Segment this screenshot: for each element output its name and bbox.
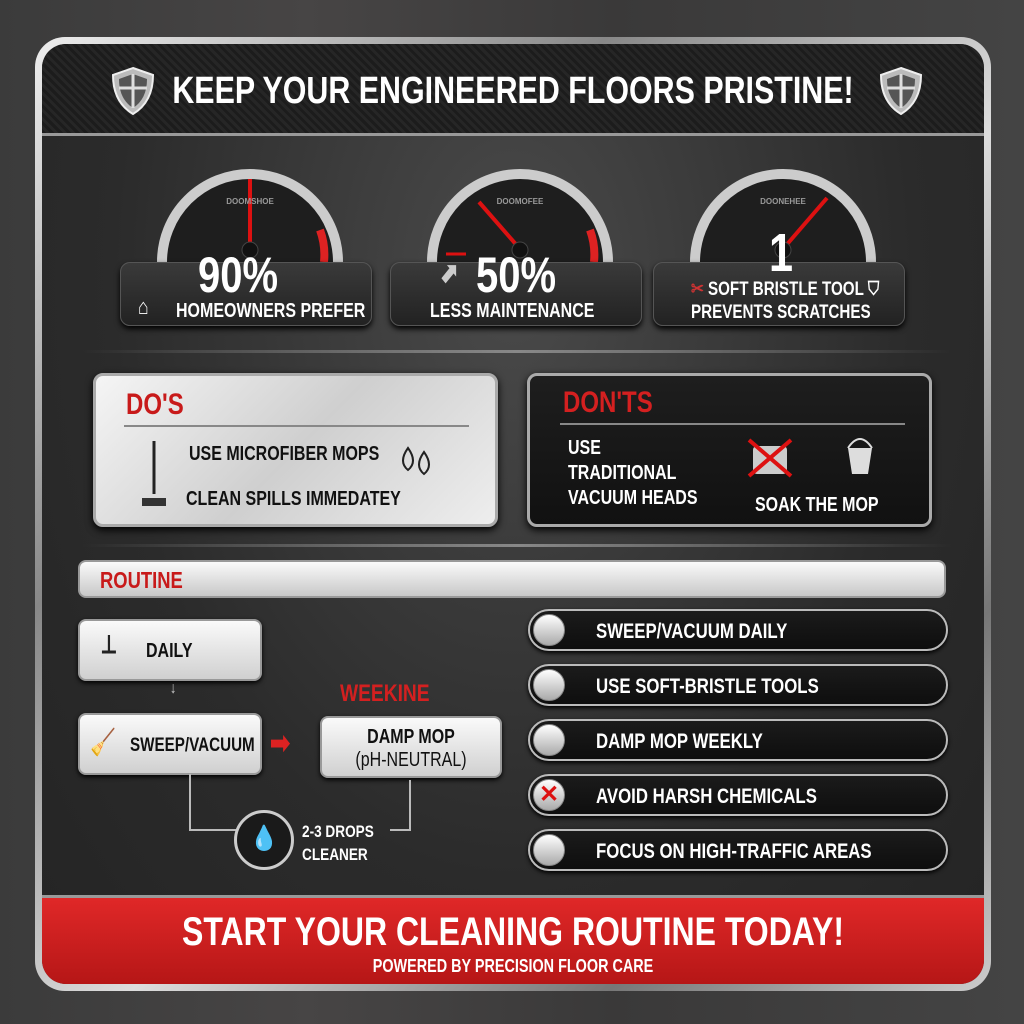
- item 3: DAMP MOP WEEKLY: [596, 730, 763, 753]
- item 5: [528, 829, 948, 871]
- title: KEEP YOUR ENGINEERED FLOORS PRISTINE!: [172, 70, 854, 112]
- item 3: [528, 719, 948, 761]
- item 4: [528, 774, 948, 816]
- label: [691, 279, 880, 323]
- label: PREVENTS SCRATCHES: [691, 302, 871, 323]
- connector lines: [189, 774, 411, 831]
- divider: [82, 544, 952, 547]
- flow: sweep/vacuum: 🧹: [90, 727, 116, 757]
- header band: [42, 44, 984, 136]
- item 4: ✕: [539, 781, 559, 808]
- icon: arrow up: ⬈: [440, 257, 459, 288]
- icon: mop: [142, 441, 166, 506]
- icon: shield left: [112, 67, 154, 116]
- text items: USE MICROFIBER MOPS: [189, 443, 379, 465]
- label: LESS MAINTENANCE: [430, 300, 594, 322]
- panel: don'ts: [527, 373, 932, 527]
- checklist: [526, 608, 950, 875]
- gauge 2: [386, 169, 645, 332]
- stat 50%: 50%: [476, 247, 556, 303]
- icon: bucket: [847, 438, 873, 474]
- panel: do's: CLEAN SPILLS IMMEDATEY: [186, 488, 401, 510]
- panel: do's: [93, 373, 498, 527]
- item 1: SWEEP/VACUUM DAILY: [596, 620, 787, 643]
- arrow down: ↓: [170, 680, 176, 697]
- gauge 3: [650, 169, 908, 332]
- heading: DON'TS: [563, 386, 653, 419]
- flow: daily: DAILY: [146, 640, 193, 662]
- divider: [82, 350, 952, 353]
- item 1: [528, 609, 948, 651]
- icon: shield right: [880, 67, 922, 116]
- icon: house: ⌂: [138, 294, 149, 319]
- label: ✂ SOFT BRISTLE TOOL ⛉: [691, 279, 879, 300]
- gauge 1: [118, 169, 375, 332]
- gauge 3: DOONEHEE: [760, 197, 807, 206]
- cta: START YOUR CLEANING ROUTINE TODAY!: [182, 910, 844, 954]
- gauge 1: DOOMSHOE: [226, 197, 274, 206]
- icon: drops: [402, 446, 430, 476]
- gauge 2: DOOMOFEE: [497, 197, 544, 206]
- routine header bar: ROUTINE: [100, 567, 183, 593]
- plaque: [120, 262, 372, 326]
- item 5: FOCUS ON HIGH-TRAFFIC AREAS: [596, 840, 872, 863]
- footer band: [42, 895, 984, 995]
- text: drops: 2-3 DROPS: [302, 822, 374, 841]
- powered by: POWERED BY PRECISION FLOOR CARE: [373, 956, 653, 976]
- stat 1: 1: [769, 223, 793, 283]
- item 2: [528, 664, 948, 706]
- flow: damp mop: DAMP MOP: [367, 726, 455, 748]
- item 4: AVOID HARSH CHEMICALS: [596, 785, 817, 808]
- heading: DO'S: [126, 388, 184, 421]
- flow: damp mop: (pH-NEUTRAL): [355, 749, 467, 771]
- flow: sweep/vacuum: SWEEP/VACUUM: [130, 735, 255, 756]
- text: vacuum heads: VACUUM HEADS: [568, 487, 697, 509]
- routine header bar: [78, 560, 946, 598]
- text: drops: CLEANER: [302, 845, 368, 864]
- text: vacuum heads: TRADITIONAL: [568, 462, 676, 484]
- icon: drops circle: [234, 810, 294, 870]
- text: drops: [302, 822, 374, 864]
- arrow right red: ➡: [270, 727, 290, 760]
- weekly label: WEEKINE: [340, 680, 430, 707]
- flow: daily: [78, 619, 262, 681]
- flow: sweep/vacuum: [78, 713, 262, 775]
- flow: damp mop: [320, 716, 502, 778]
- flow: daily: ⟂: [102, 629, 116, 659]
- text: soak: SOAK THE MOP: [755, 494, 879, 516]
- label: HOMEOWNERS PREFER: [176, 300, 365, 322]
- text: vacuum heads: [568, 437, 697, 509]
- stat 90%: 90%: [198, 247, 278, 303]
- item 2: USE SOFT-BRISTLE TOOLS: [596, 675, 819, 698]
- text: vacuum heads: USE: [568, 437, 601, 459]
- icon: crossed vacuum: [748, 438, 792, 478]
- icon: drops circle: 💧: [249, 825, 279, 852]
